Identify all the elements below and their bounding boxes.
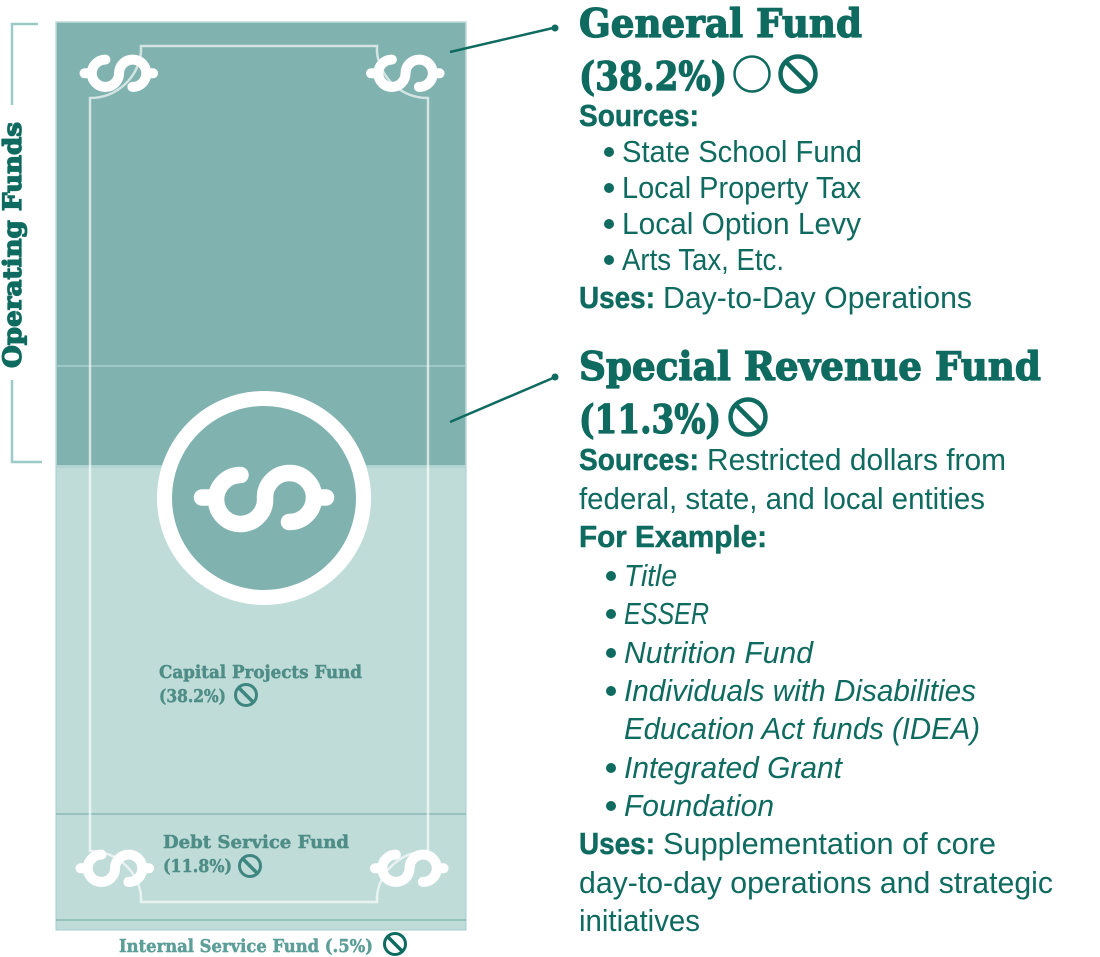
examples list: Nutrition Fund bbox=[624, 635, 815, 670]
banknote frame bbox=[90, 46, 428, 902]
examples list: ESSER bbox=[624, 596, 709, 631]
banknote graphic bbox=[56, 22, 466, 930]
label: debt service fund: (11.8%) bbox=[163, 856, 232, 877]
label: capital projects fund bbox=[159, 662, 362, 707]
label: capital projects fund: Capital Projects Fund bbox=[159, 662, 362, 683]
sources bbox=[579, 442, 1006, 516]
sources: federal, state, and local entities bbox=[579, 481, 985, 516]
icon: corner dollar bottom left bbox=[81, 855, 149, 882]
heading: special revenue fund: Special Revenue Fund bbox=[579, 344, 1041, 390]
heading: general fund: (38.2%) bbox=[579, 54, 727, 100]
operating funds block bbox=[56, 22, 466, 466]
label: debt service fund: Debt Service Fund bbox=[163, 832, 349, 853]
sources list: Local Option Levy bbox=[622, 206, 861, 241]
label: capital projects fund: (38.2%) bbox=[159, 686, 226, 707]
sources list bbox=[579, 98, 862, 277]
arrow: special revenue leader bbox=[450, 374, 558, 422]
icon: central dollar medallion bbox=[164, 398, 364, 598]
uses: Supplementation of core bbox=[663, 826, 996, 861]
heading: general fund: General Fund bbox=[579, 1, 862, 47]
sources: Sources: bbox=[579, 442, 699, 477]
examples list: Education Act funds (IDEA) bbox=[624, 711, 980, 746]
panel: special revenue fund bbox=[579, 344, 1053, 938]
heading: special revenue fund: (11.3%) bbox=[579, 397, 721, 443]
icon: prohibited bbox=[780, 56, 816, 92]
sources list: Sources: bbox=[579, 98, 699, 133]
heading: general fund bbox=[579, 1, 862, 100]
examples list: Individuals with Disabilities bbox=[624, 673, 976, 708]
icon: prohibited bbox=[240, 856, 260, 876]
uses: day-to-day operations and strategic bbox=[579, 865, 1053, 900]
sources: Restricted dollars from bbox=[707, 442, 1006, 477]
examples list: For Example: bbox=[579, 519, 767, 554]
bracket: operating funds bbox=[0, 24, 42, 462]
panel: general fund bbox=[579, 1, 972, 315]
examples list: Integrated Grant bbox=[624, 750, 843, 785]
uses bbox=[579, 826, 1053, 938]
icon: prohibited bbox=[384, 934, 406, 954]
uses: initiatives bbox=[579, 903, 700, 938]
uses: Day-to-Day Operations bbox=[663, 280, 972, 315]
label: internal service fund: Internal Service Fund (.5%) bbox=[119, 936, 373, 957]
icon: prohibited bbox=[236, 684, 256, 706]
sources list: State School Fund bbox=[622, 134, 862, 169]
icon: corner dollar top right bbox=[371, 60, 440, 87]
sources list: Arts Tax, Etc. bbox=[622, 242, 784, 277]
uses: Uses: bbox=[579, 826, 655, 861]
heading: special revenue fund bbox=[579, 344, 1041, 443]
examples list: Title bbox=[624, 558, 677, 593]
icon: corner dollar bottom right bbox=[375, 855, 444, 882]
examples list bbox=[579, 519, 980, 823]
uses: Uses: bbox=[579, 280, 655, 315]
icon: corner dollar top left bbox=[85, 60, 153, 87]
label: debt service fund bbox=[163, 832, 349, 877]
icon: empty circle bbox=[734, 56, 770, 92]
icon: prohibited bbox=[730, 400, 766, 434]
examples list: Foundation bbox=[624, 788, 774, 823]
non-operating funds block bbox=[56, 467, 466, 930]
sources list: Local Property Tax bbox=[622, 170, 861, 205]
arrow: general fund leader bbox=[450, 24, 558, 52]
